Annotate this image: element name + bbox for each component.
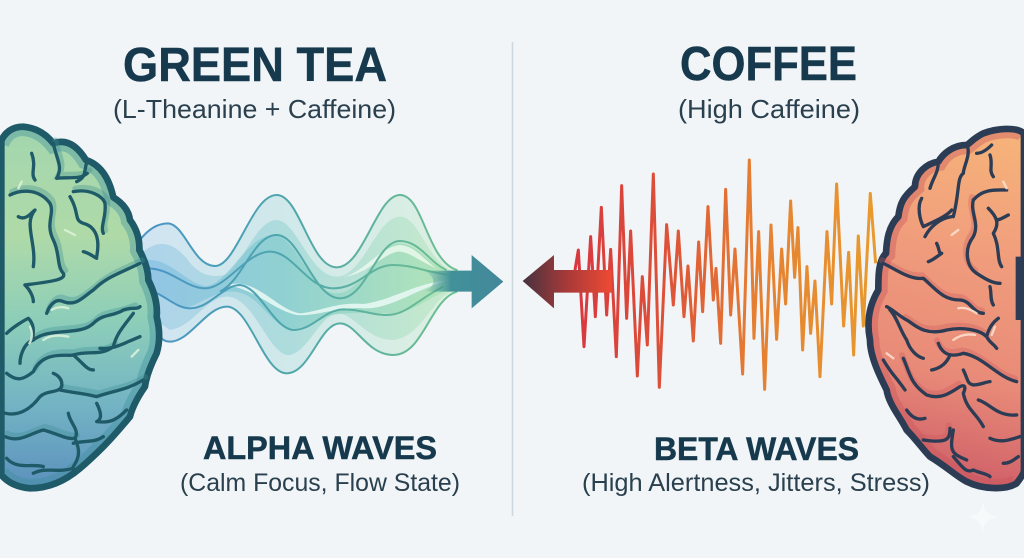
caption: alpha waves: (Calm Focus, Flow State) [180,469,460,497]
subtitle: coffee: (High Caffeine) [678,94,860,124]
zigzag line [575,160,876,389]
icon: sparkle [968,502,998,532]
heading: beta waves: BETA WAVES [654,431,859,467]
beta wave [523,160,876,389]
wave lines [148,235,450,330]
arrow [423,255,503,308]
icon: red brain [868,129,1024,488]
title: coffee: COFFEE [680,38,857,91]
center divider [512,42,513,516]
wave ribbon [140,195,457,373]
alpha wave [140,195,503,373]
caption: beta waves: (High Alertness, Jitters, Stress) [582,469,930,497]
title: green tea: GREEN TEA [123,39,387,92]
subtitle: green tea: (L-Theanine + Caffeine) [113,94,396,124]
arrow [523,255,612,308]
heading: alpha waves: ALPHA WAVES [203,430,437,466]
icon: green brain [0,127,159,488]
